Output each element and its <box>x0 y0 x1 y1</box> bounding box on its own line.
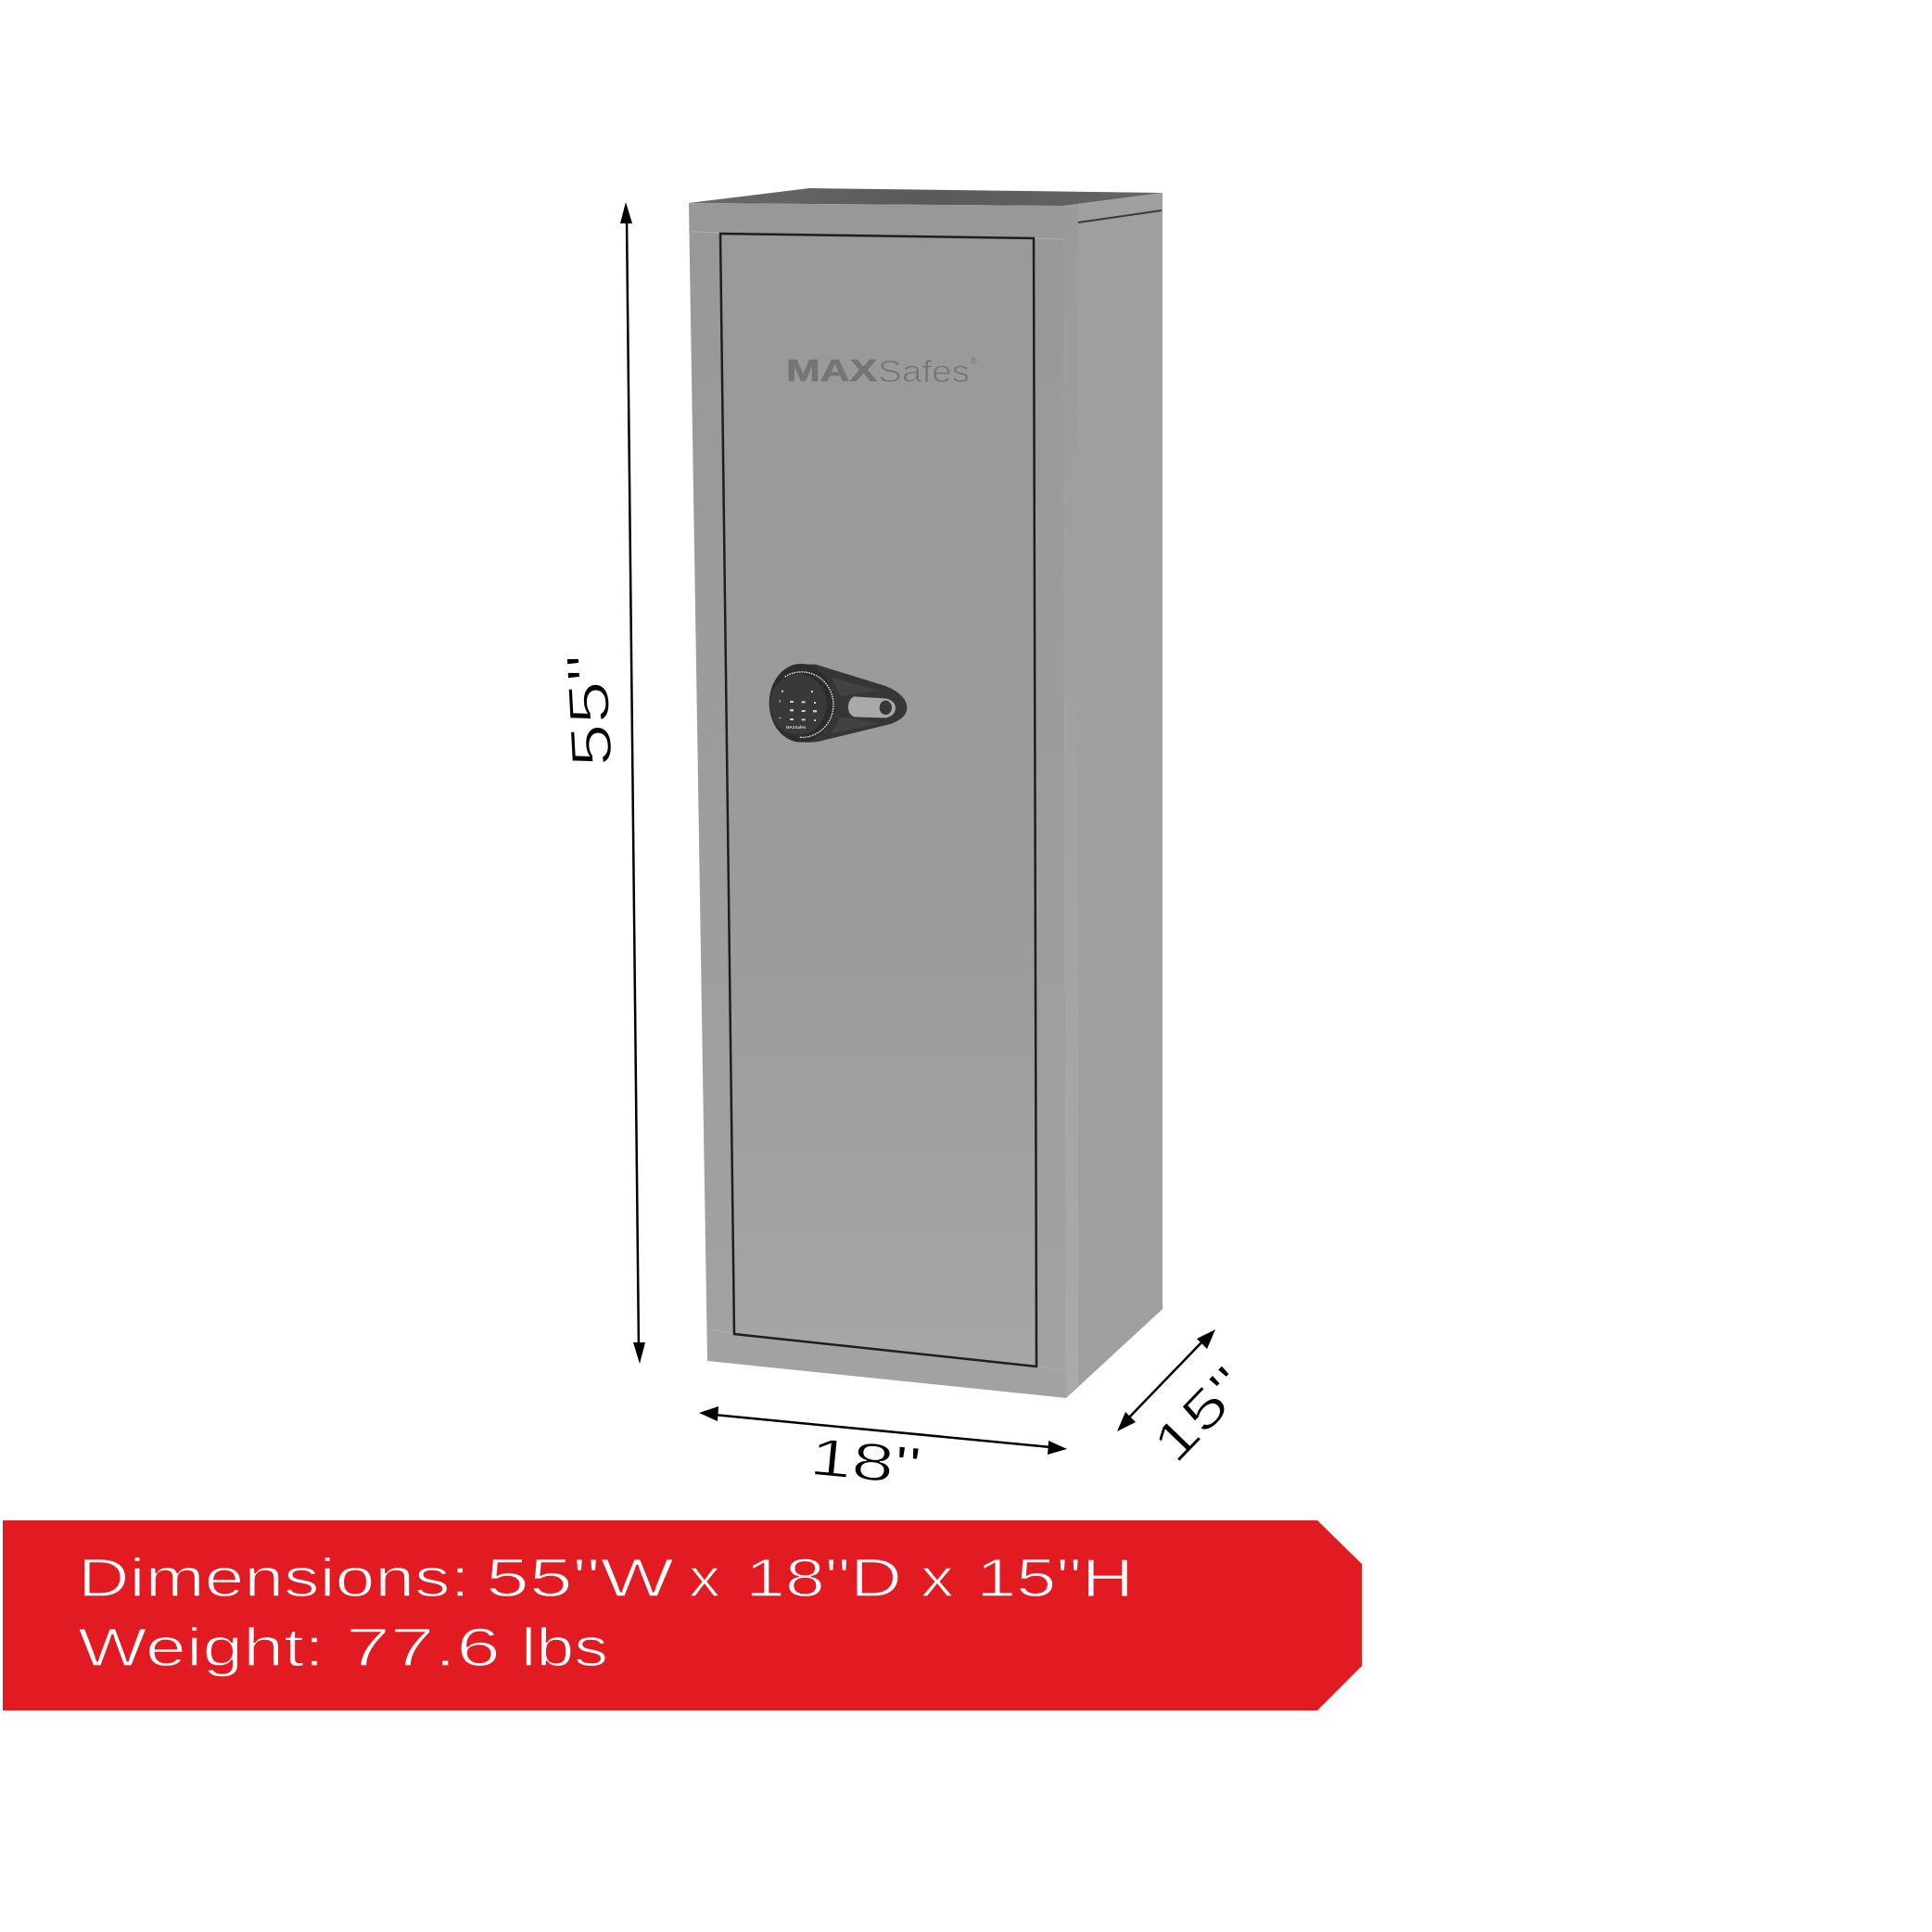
escutcheon facets <box>832 677 881 734</box>
width arrow <box>699 1406 1067 1455</box>
logo Safes: Safes <box>878 354 970 388</box>
dial dashed chrome ring <box>785 672 833 737</box>
dimensions line: x <box>689 1548 720 1608</box>
dimensions line: 55"W <box>486 1548 674 1608</box>
side panel corner strip <box>1063 204 1078 1398</box>
weight line <box>78 1618 608 1678</box>
dimensions line: 18"D <box>745 1548 902 1608</box>
frame rail seams <box>691 232 1066 1370</box>
keypad buttons <box>779 691 817 721</box>
side panel top seam <box>1078 210 1162 222</box>
depth arrow <box>1117 1329 1215 1431</box>
depth label: 15" <box>1141 1355 1259 1474</box>
door panel <box>720 234 1036 1366</box>
dimensions line: Dimensions: <box>78 1548 470 1608</box>
dimensions line: 15"H <box>976 1548 1134 1608</box>
top face of safe <box>689 188 1163 206</box>
weight line: 77.6 <box>346 1618 501 1678</box>
keypad mini brand: MAXSafes <box>786 725 807 730</box>
front frame <box>689 203 1066 1398</box>
safe cabinet <box>689 188 1163 1398</box>
width label: 18" <box>807 1427 923 1496</box>
brand logo <box>786 353 977 388</box>
lock dial outer ring <box>769 664 833 743</box>
height arrow <box>620 202 645 1364</box>
dimensions line <box>78 1548 1134 1608</box>
logo MAX: MAX <box>786 353 877 388</box>
lock escutcheon <box>800 665 907 743</box>
keypad face <box>769 674 827 735</box>
handle hole <box>880 701 892 715</box>
weight line: Weight: <box>78 1618 324 1678</box>
red specification banner <box>3 1520 1362 1710</box>
lock handle <box>848 696 896 718</box>
banner shape <box>3 1520 1362 1710</box>
height label: 55" <box>555 652 625 769</box>
dimensions line: x <box>921 1548 954 1608</box>
weight line: lbs <box>521 1618 608 1678</box>
right side panel <box>1063 193 1163 1398</box>
electronic lock <box>769 664 907 743</box>
logo registered mark: ® <box>971 356 977 365</box>
